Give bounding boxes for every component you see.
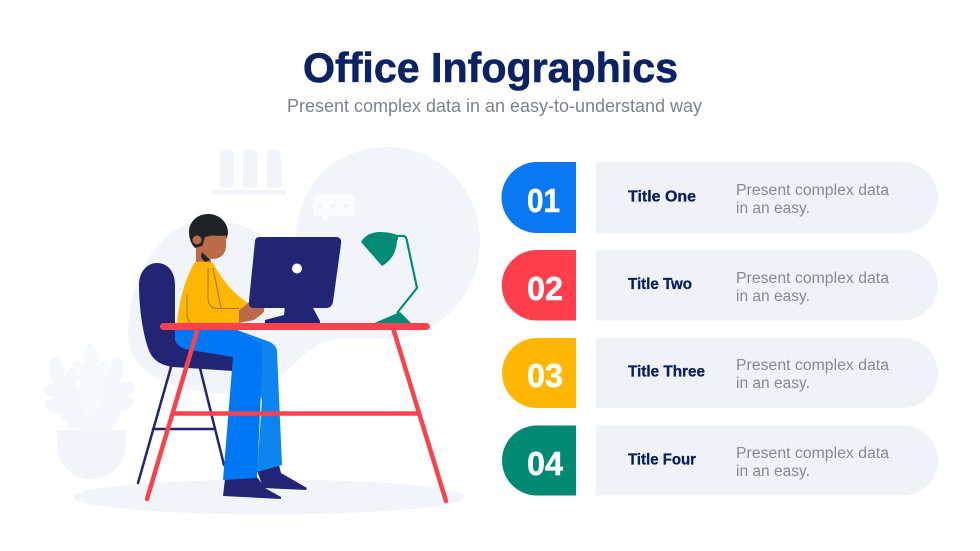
potted plant: [41, 343, 137, 479]
desk lamp: [361, 232, 417, 324]
head: [189, 214, 228, 262]
number badge 03: [502, 338, 576, 408]
number badge 02: [502, 250, 576, 320]
card: title two: Title Two: [628, 276, 692, 293]
background blob: [128, 147, 480, 393]
speech bubble: [313, 195, 354, 222]
row 4: [502, 426, 938, 496]
card: title two: Present complex data: [736, 270, 889, 287]
number badge 02: 02: [527, 270, 563, 307]
card: title four: Title Four: [628, 452, 696, 468]
card: title three: in an easy.: [736, 375, 810, 392]
illustration: office worker at desk: [41, 147, 480, 514]
shirt: [177, 262, 248, 324]
back shoe: [257, 465, 307, 490]
trousers: [175, 328, 282, 480]
shelf with books: [212, 149, 286, 194]
card: title three: [596, 338, 938, 408]
row 2: [502, 250, 938, 320]
title: Office Infographics: [303, 44, 678, 91]
row 1: [502, 162, 938, 233]
card: title four: Present complex data: [736, 445, 889, 462]
row 3: [502, 338, 938, 408]
card: title four: in an easy.: [736, 463, 810, 480]
neck and hand: [196, 240, 264, 323]
number badge 04: 04: [527, 445, 564, 482]
card: title one: Title One: [628, 188, 696, 206]
desk: [147, 323, 446, 501]
card: title two: [596, 250, 938, 320]
card: title three: Present complex data: [736, 357, 889, 374]
subtitle: Present complex data in an easy-to-understand way: [287, 96, 702, 116]
number badge 01: 01: [527, 182, 560, 219]
chair: [138, 263, 233, 483]
card: title two: in an easy.: [736, 288, 810, 305]
card: title one: [596, 162, 938, 233]
card: title four: [596, 426, 938, 496]
number badge 01: [502, 162, 576, 233]
number badge 04: [502, 426, 576, 496]
number badge 03: 03: [527, 357, 563, 394]
card: title one: in an easy.: [736, 200, 810, 217]
card: title one: Present complex data: [736, 182, 889, 199]
card: title three: Title Three: [628, 364, 705, 380]
desktop monitor: [249, 237, 341, 324]
front shoe: [223, 477, 281, 499]
ground shadow: [73, 480, 465, 514]
